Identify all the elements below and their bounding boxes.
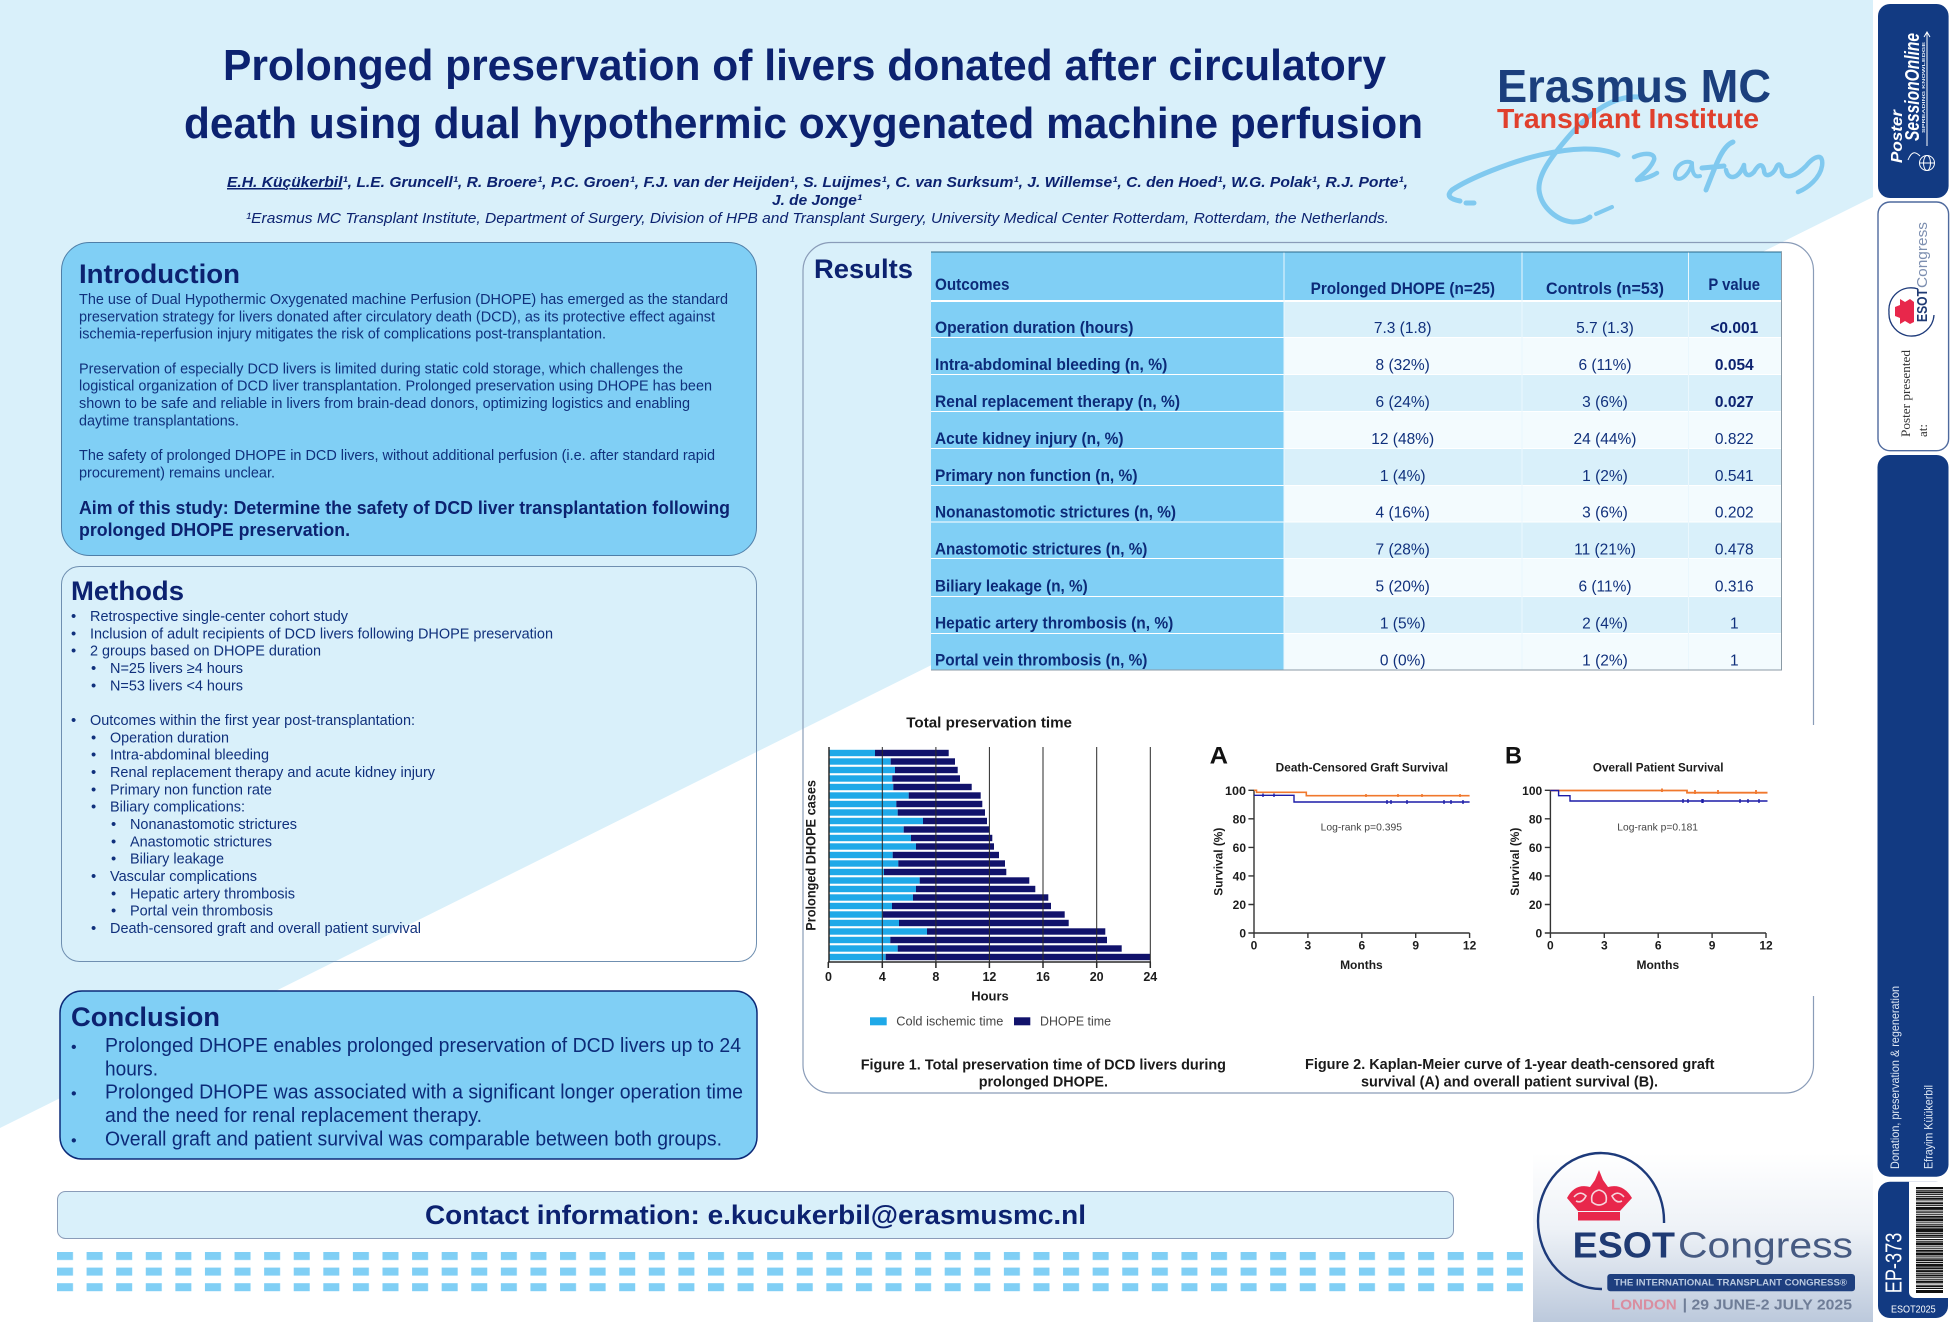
authors and affiliation: E.H. Küçükerbil ¹, L.E. Gruncell¹, R. Broere¹, P.C. Groen¹, F.J. van der Heijden¹, S. Luijmes¹, C. van Surksum¹, J. Willemse¹, C. den Hoed¹, W.G. Polak¹, R.J. Porte¹, [227,174,1408,191]
table row: primary non function: 1 (2%) [1582,468,1628,485]
panel: introduction [62,242,756,556]
list: methods bullets: N=25 livers ≥4 hours [110,661,243,677]
list: methods bullets: • [91,748,96,764]
table row: portal vein thrombosis [935,652,1739,670]
table header: Prolonged DHOPE (n=25) [1311,280,1495,298]
axis labels B: 60 [1529,841,1543,855]
caption: figure 1 [861,1057,1226,1091]
table: outcomes [931,252,1782,670]
logo: ESOT Congress: ESOT [1573,1224,1675,1265]
x axis labels: 8 [932,970,939,984]
barcode [1916,1187,1943,1293]
table row: operation duration: <0.001 [1710,320,1759,337]
list: methods bullets: • [91,765,96,781]
panel: results [803,242,1814,1093]
panel: conclusion [60,991,757,1159]
table row: renal replacement therapy: 0.027 [1715,394,1754,411]
caption: figure 1: prolonged DHOPE. [979,1075,1108,1091]
text: introduction paragraphs: shown to be safe and reliable in livers from brain-dead donors, optimizing logistics and enabling [79,396,690,412]
list: conclusion bullets: • [71,1039,77,1056]
table row: hepatic artery thrombosis: 2 (4%) [1582,616,1628,632]
logo: ESOT Congress [1533,1153,1873,1322]
list: methods bullets: Death-censored graft and overall patient survival [110,921,421,937]
list: methods bullets: Portal vein thrombosis [130,904,273,920]
banner [1607,1274,1855,1291]
axis labels A: 12 [1463,938,1477,952]
sidebar: poster id and barcode [1878,1182,1948,1318]
y axis label: Prolonged DHOPE cases [804,780,819,931]
heading: conclusion: Conclusion [71,1002,220,1032]
list: conclusion bullets [71,1035,743,1150]
caption: figure 2: Figure 2. Kaplan-Meier curve of 1-year death-censored graft [1305,1057,1715,1073]
list: methods bullets: Anastomotic strictures [130,834,272,850]
table header: P value [1708,276,1760,294]
table row: intra-abdominal bleeding: 0.054 [1715,357,1754,374]
list: methods bullets: • [91,921,96,937]
axis labels B: 6 [1655,938,1662,952]
text: introduction paragraphs: preservation strategy for livers donated after circulatory death (DCD), as its protective effect against [79,309,716,325]
icon: crown [1567,1170,1632,1220]
table row: biliary leakage: Biliary leakage (n, %) [935,578,1088,596]
table row: anastomotic strictures: 11 (21%) [1574,542,1636,558]
sidebar: poster presented at ESOT Congress: Congress [1914,222,1931,288]
list: methods bullets: Renal replacement therapy and acute kidney injury [110,765,436,781]
chart A: death-censored graft survival: A [1210,742,1228,769]
axis labels B [1508,784,1773,972]
table row: nonanastomotic strictures: 3 (6%) [1582,504,1628,522]
axis labels A: 20 [1233,898,1246,912]
text: introduction paragraphs: The safety of prolonged DHOPE in DCD livers, without additional perfusion (i.e. after standard rapid [79,448,715,464]
list: conclusion bullets: and the need for renal replacement therapy. [105,1105,482,1127]
table row: intra-abdominal bleeding: Intra-abdominal bleeding (n, %) [935,356,1167,374]
table row: anastomotic strictures: 7 (28%) [1376,542,1430,558]
table row: hepatic artery thrombosis: 1 [1730,616,1739,632]
table row: intra-abdominal bleeding: 6 (11%) [1578,357,1632,374]
axis labels A: 3 [1305,938,1312,952]
legend: Cold ischemic time [896,1015,1003,1029]
chart B: overall patient survival [1505,742,1773,972]
logo: Erasmus MC Transplant Institute [1449,60,1822,222]
list: methods bullets: • [111,852,116,868]
heading: results: Results [814,254,913,284]
heading: introduction: Introduction [79,259,240,289]
table row: primary non function: 0.541 [1715,468,1754,485]
table row: nonanastomotic strictures: Nonanastomotic strictures (n, %) [935,504,1176,522]
list: methods bullets: • [91,869,96,885]
axis labels A: Survival (%) [1212,828,1226,896]
sidebar: poster presented at ESOT Congress [1878,202,1949,451]
sidebar: poster session online: SPREADING KNOWLEDGE [1921,42,1926,133]
list: methods bullets: Biliary leakage [130,852,224,868]
banner: THE INTERNATIONAL TRANSPLANT CONGRESS® [1614,1278,1847,1288]
list: methods bullets: • [91,661,96,677]
axis labels B: 0 [1547,938,1554,952]
title: Prolonged preservation of livers donated after circulatory [223,41,1387,90]
x axis labels [825,970,1157,1004]
table row: primary non function [935,467,1754,485]
logo: Erasmus MC Transplant Institute: Erasmus MC [1497,60,1771,112]
x axis labels: 12 [982,970,996,984]
list: methods bullets: N=53 livers <4 hours [110,678,243,694]
table row: operation duration: 5.7 (1.3) [1576,320,1634,337]
table row: acute kidney injury: Acute kidney injury (n, %) [935,430,1124,448]
curve: prolonged blue A [1254,794,1470,804]
table row: anastomotic strictures [935,540,1754,558]
list: methods bullets: Operation duration [110,730,229,746]
axis labels B: 20 [1529,898,1543,912]
text: introduction paragraphs: The use of Dual Hypothermic Oxygenated machine Perfusion (DHOPE) has emerged as the standard [79,292,728,308]
table row: biliary leakage: 6 (11%) [1578,578,1632,596]
axis labels A: 9 [1412,938,1419,952]
list: methods bullets: • [91,782,96,798]
location and date: | 29 JUNE-2 JULY 2025 [1683,1296,1852,1313]
x axis labels: 20 [1090,970,1104,984]
logo: Erasmus MC Transplant Institute: Transplant Institute [1497,103,1759,134]
list: methods bullets: • [111,886,116,902]
chart title: Total preservation time [906,716,1072,732]
list: methods bullets: Outcomes within the first year post-transplantation: [90,713,415,729]
table row: nonanastomotic strictures: 0.202 [1715,504,1754,522]
axis labels A: 60 [1233,841,1246,855]
table row: renal replacement therapy: 6 (24%) [1376,394,1430,411]
text: aim of study: prolonged DHOPE preservation. [79,519,350,540]
axis labels B: 9 [1709,938,1716,952]
icon: arrow [1924,32,1930,146]
list: methods bullets: 2 groups based on DHOPE duration [90,644,321,660]
table row: acute kidney injury: 24 (44%) [1574,431,1636,448]
table row: anastomotic strictures: 0.478 [1715,542,1754,558]
bars: DHOPE time [875,750,1150,960]
sidebar: session info: Efrayim Küükerbil [1922,1085,1936,1169]
chart: total preservation time bars [804,716,1157,1029]
panel: methods [62,566,756,962]
table row: renal replacement therapy: Renal replacement therapy (n, %) [935,393,1180,411]
text: introduction paragraphs: ischemia-reperfusion injury mitigates the risk of complications post-transplantation. [79,327,606,343]
caption: figure 1: Figure 1. Total preservation time of DCD livers during [861,1057,1226,1073]
x axis labels: Hours [971,989,1009,1004]
chart A: death-censored graft survival [1210,742,1477,972]
text: introduction paragraphs: Preservation of especially DCD livers is limited during static cold storage, which challenges the [79,361,683,377]
axis labels B: Months [1636,958,1679,972]
table row: intra-abdominal bleeding: 8 (32%) [1376,357,1430,374]
table row: nonanastomotic strictures [935,504,1754,522]
caption: figure 2 [1305,1057,1715,1091]
table row: operation duration: Operation duration (hours) [935,319,1134,337]
list: methods bullets: • [91,678,96,694]
axis labels B: Survival (%) [1508,828,1522,896]
table row: renal replacement therapy: 3 (6%) [1582,394,1628,411]
legend: DHOPE time [1040,1015,1111,1029]
sidebar: poster presented at ESOT Congress: Poster presented [1898,349,1913,437]
text: introduction paragraphs: procurement) remains unclear. [79,465,275,481]
table row: portal vein thrombosis: 0 (0%) [1380,652,1426,670]
icon: small circle with crown [1889,288,1934,336]
title [184,41,1423,148]
chart B: overall patient survival: B [1505,742,1522,769]
axis labels A: 6 [1358,938,1365,952]
table header: Outcomes [935,276,1010,294]
x axis labels: 0 [825,970,832,984]
axis labels B: 3 [1601,938,1608,952]
location and date [1611,1296,1852,1313]
heading: methods: Methods [71,576,184,606]
sidebar: session info: Donation, preservation & regeneration [1888,986,1902,1169]
list: conclusion bullets: Overall graft and patient survival was comparable between both groups. [105,1128,722,1150]
axis labels A: 0 [1251,938,1258,952]
text: introduction paragraphs: daytime transplantations. [79,413,239,429]
grid and axes [828,747,1151,968]
text: introduction paragraphs [79,292,728,481]
table row: portal vein thrombosis: 1 (2%) [1582,652,1628,670]
list: methods bullets: • [111,904,116,920]
x axis labels: 24 [1143,970,1157,984]
table row: renal replacement therapy [935,393,1754,411]
table header: Controls (n=53) [1546,280,1664,298]
list: methods bullets: Inclusion of adult recipients of DCD livers following DHOPE preservation [90,626,553,642]
text: aim of study: Aim of this study: Determine the safety of DCD liver transplantation following [79,497,730,518]
table row: acute kidney injury [935,430,1754,448]
table row: portal vein thrombosis: Portal vein thrombosis (n, %) [935,652,1147,670]
authors and affiliation: ¹Erasmus MC Transplant Institute, Department of Surgery, Division of HPB and Transplant Surgery, University Medical Center Rotterdam, Rotterdam, the Netherlands. [246,210,1389,227]
list: methods bullets: Hepatic artery thrombosis [130,886,295,902]
sidebar: session info [1878,455,1948,1177]
list: methods bullets: • [71,626,76,642]
table row: biliary leakage [935,578,1754,596]
legend [870,1015,1111,1029]
list: conclusion bullets: Prolonged DHOPE was associated with a significant longer operation time [105,1082,743,1104]
text: aim of study [79,497,730,540]
x axis labels: 16 [1036,970,1050,984]
table row: operation duration [935,319,1759,337]
chart B: overall patient survival: Overall Patient Survival [1593,762,1724,774]
sidebar: poster session online: SessionOnline [1902,33,1924,141]
axis labels A: Months [1340,958,1383,972]
table row: primary non function: Primary non function (n, %) [935,467,1138,485]
axis labels A: 100 [1225,784,1246,798]
list: methods bullets: Intra-abdominal bleeding [110,748,269,764]
list: methods bullets: • [91,800,96,816]
sidebar: poster session online [1878,4,1949,198]
axis labels A [1212,784,1477,972]
sidebar: poster presented at ESOT Congress: at: [1915,424,1930,437]
table row: biliary leakage: 5 (20%) [1376,578,1430,596]
curve: prolonged blue B [1550,790,1768,803]
axes B [1545,790,1766,938]
sidebar: poster id and barcode: EP-373 [1881,1233,1907,1293]
axes A [1248,790,1470,938]
table row: hepatic artery thrombosis: Hepatic artery thrombosis (n, %) [935,614,1173,632]
table header [935,276,1760,298]
panel: contact information: Contact information: e.kucukerbil@erasmusmc.nl [425,1200,1086,1230]
list: conclusion bullets: • [71,1086,77,1103]
list: conclusion bullets: Prolonged DHOPE enables prolonged preservation of DCD livers up to 24 [105,1035,741,1057]
table row: portal vein thrombosis: 1 [1730,652,1739,670]
authors and affiliation [227,174,1408,227]
list: methods bullets: • [71,609,76,625]
sidebar: poster presented at ESOT Congress: ESOT [1915,289,1931,322]
list: methods bullets: Retrospective single-center cohort study [90,609,349,625]
table row: anastomotic strictures: Anastomotic strictures (n, %) [935,540,1147,558]
panel: contact information [58,1192,1454,1238]
list: methods bullets: • [71,644,76,660]
table row: hepatic artery thrombosis: 1 (5%) [1380,616,1426,632]
chart A: death-censored graft survival: Death-Censored Graft Survival [1276,762,1448,774]
x axis labels: 4 [879,970,886,984]
chart A: death-censored graft survival: Log-rank p=0.395 [1321,822,1402,834]
axis labels B: 100 [1522,784,1543,798]
list: methods bullets: Primary non function rate [110,782,272,798]
curve: controls orange B [1550,788,1768,794]
axis labels B: 40 [1529,869,1543,883]
text: introduction paragraphs: logistical organization of DCD liver transplantation. Prolonged preservation using DHOPE has been [79,379,712,395]
axis labels B: 0 [1536,926,1543,940]
chart B: overall patient survival: Log-rank p=0.181 [1617,822,1698,834]
list: methods bullets: Vascular complications [110,869,257,885]
list: methods bullets: • [111,817,116,833]
curve: controls orange A [1254,790,1470,797]
caption: figure 2: survival (A) and overall patient survival (B). [1361,1075,1658,1091]
list: methods bullets: • [111,834,116,850]
axis labels A: 80 [1233,812,1246,826]
table row: hepatic artery thrombosis [935,614,1739,632]
bars: cold ischemic time [829,750,927,960]
logo: ESOT Congress: Congress [1678,1224,1853,1265]
table row: acute kidney injury: 0.822 [1715,431,1754,448]
axis labels A: 0 [1239,926,1246,940]
authors and affiliation: J. de Jonge¹ [772,192,862,209]
axis labels B: 80 [1529,812,1543,826]
table row: primary non function: 1 (4%) [1380,468,1426,485]
table row: nonanastomotic strictures: 4 (16%) [1376,504,1430,522]
axis labels A: 40 [1233,869,1246,883]
list: conclusion bullets: hours. [105,1058,158,1080]
list: methods bullets: Biliary complications: [110,800,245,816]
title: death using dual hypothermic oxygenated machine perfusion [184,99,1423,148]
sidebar: poster id and barcode: ESOT2025 [1891,1304,1936,1316]
list: methods bullets: • [91,730,96,746]
sidebar: poster session online: Poster [1889,109,1906,163]
location and date: LONDON [1611,1296,1677,1313]
icon: circle arc [1538,1153,1664,1289]
list: methods bullets: • [71,713,76,729]
list: methods bullets [71,609,553,937]
icon: globe [1908,153,1934,170]
list: conclusion bullets: • [71,1132,77,1149]
table row: biliary leakage: 0.316 [1715,578,1754,596]
list: methods bullets: Nonanastomotic strictures [130,817,297,833]
table row: intra-abdominal bleeding [935,356,1754,374]
axis labels B: 12 [1759,938,1773,952]
table row: acute kidney injury: 12 (48%) [1371,431,1434,448]
table row: operation duration: 7.3 (1.8) [1374,320,1432,337]
